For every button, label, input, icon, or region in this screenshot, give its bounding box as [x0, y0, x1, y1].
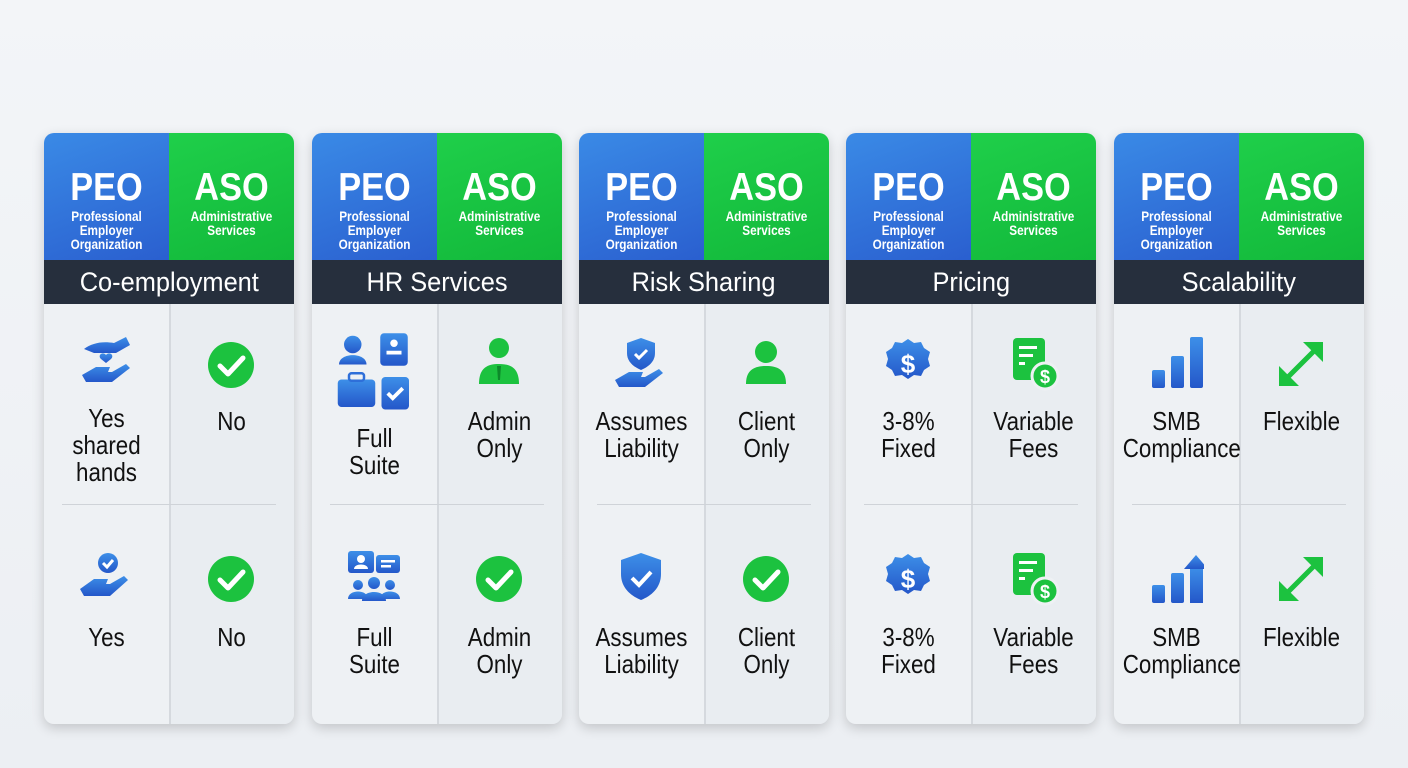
- icon: dollar badge: [886, 554, 930, 594]
- text: Variable Fees: Fees: [1009, 649, 1058, 679]
- header: PEO: [44, 133, 169, 260]
- header: PEO: [1114, 133, 1239, 260]
- text: Full Suite: [349, 622, 400, 679]
- text: Flexible: Flexible: [1263, 622, 1340, 652]
- header: PEO: Professional: [606, 208, 677, 224]
- header: PEO: [579, 133, 704, 260]
- card body: [1123, 304, 1346, 724]
- text: 3-8% Fixed: 3-8%: [882, 406, 935, 436]
- header: PEO: Employer: [1150, 222, 1203, 238]
- text: Assumes Liability: [596, 406, 687, 463]
- header: ASO: [971, 133, 1096, 260]
- text: Variable Fees: Fees: [1009, 433, 1058, 463]
- header: ASO: Services: [1009, 222, 1058, 238]
- title bar: Scalability: [1182, 267, 1296, 297]
- icon: fees document: [1013, 338, 1056, 388]
- header: ASO: Administrative: [726, 208, 807, 224]
- text: Assumes Liability: Liability: [604, 433, 679, 463]
- text: Full Suite: Suite: [349, 649, 400, 679]
- card: Co-employment: [44, 133, 294, 724]
- text: Admin Only: Admin: [468, 406, 531, 436]
- text: Assumes Liability: Assumes: [596, 406, 687, 436]
- title bar: Co-employment: [79, 267, 259, 297]
- text: Assumes Liability: [596, 622, 687, 679]
- header: PEO: Organization: [71, 236, 142, 252]
- header: ASO: Services: [207, 222, 256, 238]
- text: SMB Compliance: [1123, 406, 1241, 463]
- icon: hand shield: [615, 338, 663, 387]
- title bar: [579, 260, 829, 304]
- icon: check: [476, 556, 522, 602]
- text: Admin Only: [468, 406, 531, 463]
- header: ASO: ASO: [996, 166, 1071, 209]
- header: PEO: Employer: [615, 222, 668, 238]
- header: ASO: [704, 133, 829, 260]
- icon: dollar badge: [886, 339, 930, 379]
- text: Client Only: [738, 622, 795, 679]
- text: 3-8% Fixed: Fixed: [881, 649, 936, 679]
- text: Full Suite: Suite: [349, 450, 400, 480]
- icon: admin person: [479, 338, 519, 384]
- header: PEO: Organization: [606, 236, 677, 252]
- text: 3-8% Fixed: 3-8%: [882, 622, 935, 652]
- header: PEO: Organization: [339, 236, 410, 252]
- text: Assumes Liability: Assumes: [596, 622, 687, 652]
- title bar: [44, 260, 294, 304]
- text: Yes shared hands: hands: [76, 457, 137, 487]
- header: PEO: PEO: [872, 166, 945, 209]
- text: Variable Fees: Variable: [993, 406, 1074, 436]
- header: PEO: Employer: [882, 222, 935, 238]
- header: PEO: Employer: [80, 222, 133, 238]
- title bar: Risk Sharing: [632, 267, 776, 297]
- header: ASO: [1239, 133, 1364, 260]
- icon: bar chart up: [1152, 555, 1204, 603]
- icon: shared hands: [82, 337, 130, 382]
- text: Yes shared hands: [72, 403, 141, 487]
- card: Risk Sharing: [579, 133, 829, 724]
- header: PEO: Professional: [71, 208, 142, 224]
- header: ASO: Services: [1277, 222, 1326, 238]
- header: PEO: Professional: [1141, 208, 1212, 224]
- header: ASO: Services: [742, 222, 791, 238]
- header: ASO: Administrative: [1261, 208, 1342, 224]
- text: Client Only: [738, 406, 795, 463]
- header: PEO: PEO: [605, 166, 678, 209]
- text: Yes shared hands: Yes: [88, 403, 125, 433]
- header: PEO: PEO: [70, 166, 143, 209]
- text: SMB Compliance: SMB: [1152, 406, 1201, 436]
- header: PEO: Professional: [339, 208, 410, 224]
- text: Full Suite: Full: [356, 423, 393, 453]
- icon: bar chart: [1152, 337, 1203, 388]
- card body: [864, 304, 1078, 724]
- text: Assumes Liability: Liability: [604, 649, 679, 679]
- icon: suite: [338, 333, 409, 410]
- text: Full Suite: Full: [356, 622, 393, 652]
- text: Client Only: Only: [744, 433, 789, 463]
- card: HR Services: [312, 133, 562, 724]
- text: Admin Only: Admin: [468, 622, 531, 652]
- header: PEO: [846, 133, 971, 260]
- card body: [596, 304, 811, 724]
- text: No: No: [217, 406, 246, 436]
- text: Full Suite: [349, 423, 400, 480]
- text: Admin Only: Only: [477, 649, 522, 679]
- header: ASO: [437, 133, 562, 260]
- header: ASO: Administrative: [191, 208, 272, 224]
- text: No: No: [217, 622, 246, 652]
- text: Client Only: Client: [738, 622, 795, 652]
- icon: fees document: [1013, 553, 1056, 602]
- header: PEO: PEO: [1140, 166, 1213, 209]
- text: Variable Fees: Variable: [993, 622, 1074, 652]
- header: PEO: Employer: [348, 222, 401, 238]
- header: ASO: ASO: [1264, 166, 1339, 209]
- title bar: [846, 260, 1096, 304]
- header: ASO: ASO: [194, 166, 269, 209]
- card body: [62, 304, 276, 724]
- icon: check: [208, 342, 254, 388]
- text: Admin Only: Only: [477, 433, 522, 463]
- header: PEO: Organization: [1141, 236, 1212, 252]
- text: SMB Compliance: [1123, 622, 1241, 679]
- header: ASO: Administrative: [993, 208, 1074, 224]
- header: PEO: Professional: [873, 208, 944, 224]
- text: SMB Compliance: Compliance: [1123, 433, 1241, 463]
- text: Client Only: Client: [738, 406, 795, 436]
- header: PEO: [312, 133, 437, 260]
- text: SMB Compliance: SMB: [1152, 622, 1201, 652]
- header: ASO: ASO: [729, 166, 804, 209]
- icon: shield: [621, 553, 661, 600]
- text: Yes shared hands: shared: [72, 430, 141, 460]
- text: Admin Only: [468, 622, 531, 679]
- text: Variable Fees: [993, 406, 1074, 463]
- icon: people chat: [348, 551, 400, 601]
- header: ASO: ASO: [462, 166, 537, 209]
- text: 3-8% Fixed: Fixed: [881, 433, 936, 463]
- text: SMB Compliance: Compliance: [1123, 649, 1241, 679]
- icon: check: [743, 556, 789, 602]
- header: PEO: PEO: [338, 166, 411, 209]
- title bar: Pricing: [932, 267, 1010, 297]
- header: ASO: Services: [475, 222, 524, 238]
- text: Client Only: Only: [744, 649, 789, 679]
- header: ASO: [169, 133, 294, 260]
- title bar: [312, 260, 562, 304]
- text: Yes: Yes: [88, 622, 125, 652]
- card: Scalability: [1114, 133, 1364, 724]
- header: PEO: Organization: [873, 236, 944, 252]
- icon: hand check: [80, 553, 128, 596]
- icon: client person: [746, 341, 786, 384]
- icon: flexible arrow: [1279, 342, 1323, 386]
- card: Pricing: [846, 133, 1096, 724]
- icon: flexible arrow: [1279, 557, 1323, 601]
- title bar: HR Services: [366, 267, 508, 297]
- card body: [330, 304, 544, 724]
- icon: check: [208, 556, 254, 602]
- text: Flexible: Flexible: [1263, 406, 1340, 436]
- text: Variable Fees: [993, 622, 1074, 679]
- text: 3-8% Fixed: [881, 406, 936, 463]
- text: 3-8% Fixed: [881, 622, 936, 679]
- title bar: [1114, 260, 1364, 304]
- header: ASO: Administrative: [459, 208, 540, 224]
